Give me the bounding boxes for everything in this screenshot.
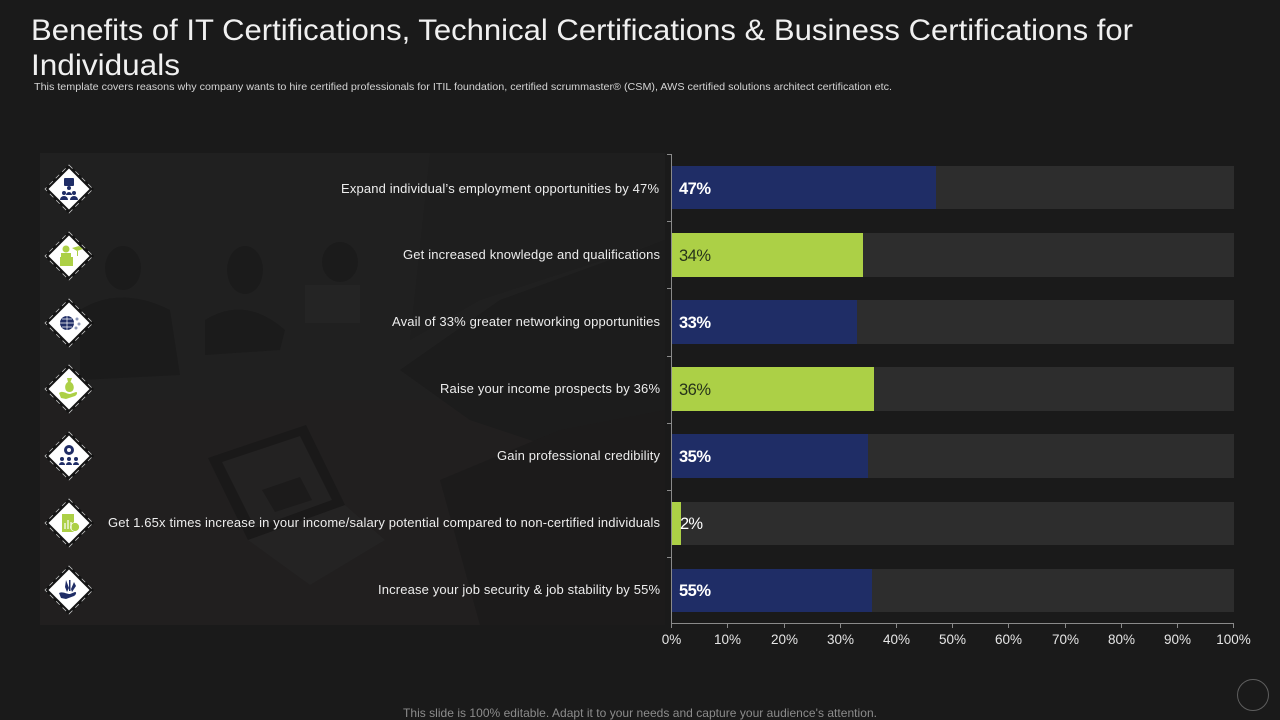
benefit labels: Increase your job security & job stability by 55% — [378, 582, 660, 597]
horizontal axis: 100% — [1216, 632, 1251, 647]
benefit labels: Avail of 33% greater networking opportunities — [392, 314, 660, 329]
footer note: This slide is 100% editable. Adapt it to your needs and capture your audience's attention. — [403, 706, 877, 720]
bar row 5 — [672, 434, 1234, 478]
title: Benefits of IT Certifications, Technical Certifications & Business Certifications for — [31, 14, 1133, 47]
benefit labels — [108, 181, 660, 597]
icon: income money bag — [44, 364, 94, 414]
benefit labels: Expand individual’s employment opportunities by 47% — [341, 181, 659, 196]
panel: meeting photo — [222, 285, 384, 584]
bar row 5: 35% — [679, 448, 711, 466]
icon: employment hierarchy — [44, 164, 94, 214]
bar row 7 — [672, 569, 1234, 612]
circle button — [1238, 680, 1268, 710]
icon: networking globe — [44, 298, 94, 348]
bar chart — [672, 166, 1234, 612]
horizontal axis: 20% — [771, 632, 798, 647]
horizontal axis: 70% — [1052, 632, 1079, 647]
icon: job security hand — [44, 565, 94, 615]
vertical axis — [667, 154, 672, 624]
bar row 3 — [672, 300, 1234, 344]
bar row 2 — [672, 233, 1234, 277]
bar row 6: 2% — [680, 515, 703, 533]
bar row 7: 55% — [679, 582, 711, 600]
horizontal axis: 0% — [662, 632, 681, 647]
bar row 6 — [672, 502, 1234, 545]
bar row 4 — [672, 367, 1234, 411]
bar row 1 — [672, 166, 1234, 209]
icon: salary building — [44, 498, 94, 548]
benefit labels: Gain professional credibility — [497, 448, 660, 463]
benefit labels: Get 1.65x times increase in your income/salary potential compared to non-certified individuals — [108, 515, 660, 530]
icon: knowledge graduate — [44, 231, 94, 281]
icon: credibility award — [44, 431, 94, 481]
subtitle: This template covers reasons why company wants to hire certified professionals for ITIL foundation, certified scrummaster® (CSM), AWS certified solutions architect certification etc. — [34, 81, 892, 93]
laptop in photo — [249, 506, 342, 540]
title: Individuals — [31, 49, 180, 82]
benefit labels: Raise your income prospects by 36% — [440, 381, 660, 396]
horizontal axis: 30% — [827, 632, 854, 647]
horizontal axis — [662, 623, 1251, 647]
horizontal axis: 50% — [939, 632, 966, 647]
horizontal axis: 10% — [714, 632, 741, 647]
horizontal axis: 90% — [1164, 632, 1191, 647]
title — [31, 14, 1133, 82]
horizontal axis: 40% — [883, 632, 910, 647]
horizontal axis: 80% — [1108, 632, 1135, 647]
bar row 3: 33% — [679, 314, 711, 332]
bar row 1: 47% — [679, 180, 711, 198]
benefit labels: Get increased knowledge and qualifications — [403, 247, 660, 262]
bar row 2: 34% — [679, 247, 711, 265]
horizontal axis: 60% — [995, 632, 1022, 647]
bar row 4: 36% — [679, 381, 711, 399]
